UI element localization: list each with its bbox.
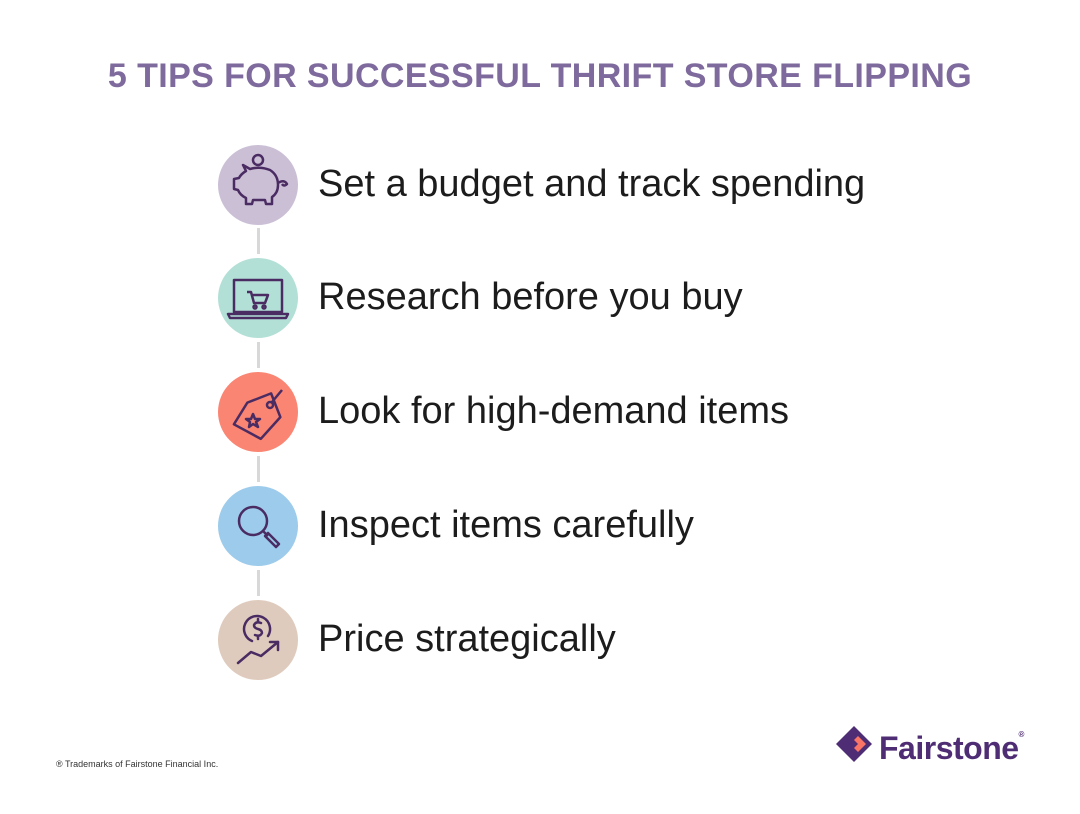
text: tip 2: Research before you buy bbox=[318, 276, 743, 318]
logo: Fairstone® bbox=[879, 730, 1024, 766]
title: 5 TIPS FOR SUCCESSFUL THRIFT STORE FLIPPING bbox=[108, 57, 972, 95]
text: tip 4: Inspect items carefully bbox=[318, 504, 694, 546]
icon: piggy bank bbox=[218, 145, 298, 225]
icon: laptop cart bbox=[218, 258, 298, 338]
icon: price tag bbox=[218, 372, 298, 452]
footnote: ® Trademarks of Fairstone Financial Inc. bbox=[56, 759, 218, 769]
text: tip 5: Price strategically bbox=[318, 618, 616, 660]
text: tip 3: Look for high-demand items bbox=[318, 390, 789, 432]
icon: magnifier bbox=[218, 486, 298, 566]
icon: dollar growth bbox=[218, 600, 298, 680]
logo bbox=[836, 726, 1024, 766]
text: tip 1: Set a budget and track spending bbox=[318, 163, 865, 205]
